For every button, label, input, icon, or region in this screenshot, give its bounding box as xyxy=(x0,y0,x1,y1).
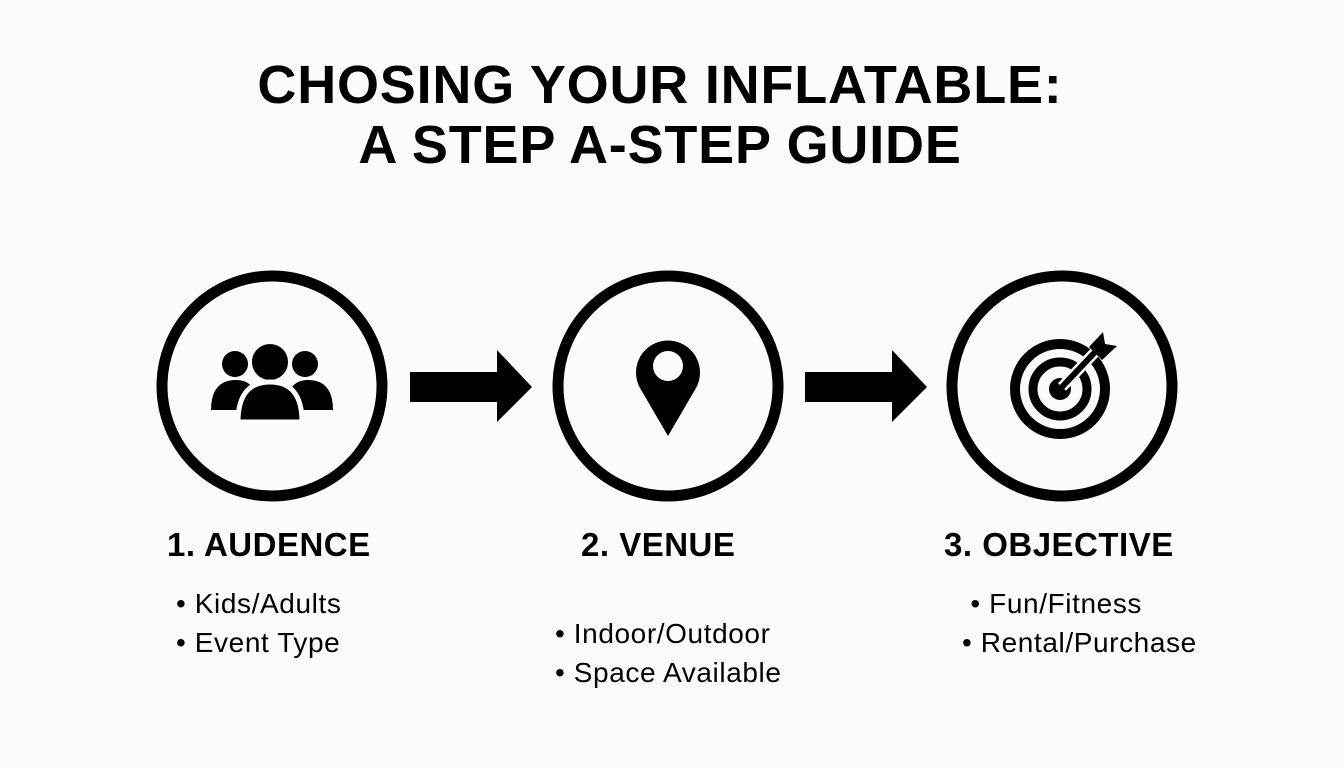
bullets 3 xyxy=(962,588,1197,658)
title: A STEP A-STEP GUIDE xyxy=(358,115,962,175)
bullets 2: • Space Available xyxy=(555,657,782,688)
bullets 3: • Fun/Fitness xyxy=(970,588,1142,619)
title xyxy=(257,55,1063,175)
label 1: 1. AUDENCE xyxy=(167,526,371,563)
bullets 1: • Event Type xyxy=(176,627,340,658)
label 3: 3. OBJECTIVE xyxy=(944,526,1174,563)
step 2 circle with location pin xyxy=(558,276,778,496)
bullets 2: • Indoor/Outdoor xyxy=(555,618,771,649)
bullets 1: • Kids/Adults xyxy=(176,588,341,619)
arrow 2 xyxy=(805,350,927,422)
step 3 circle with target icon xyxy=(952,276,1172,496)
step 1 circle with people icon xyxy=(162,276,382,496)
bullets 3: • Rental/Purchase xyxy=(962,627,1197,658)
arrow 1 xyxy=(410,350,532,422)
label 2: 2. VENUE xyxy=(581,526,735,563)
bullets 1 xyxy=(176,588,341,658)
bullets 2 xyxy=(555,618,782,688)
title: CHOSING YOUR INFLATABLE: xyxy=(257,55,1063,115)
